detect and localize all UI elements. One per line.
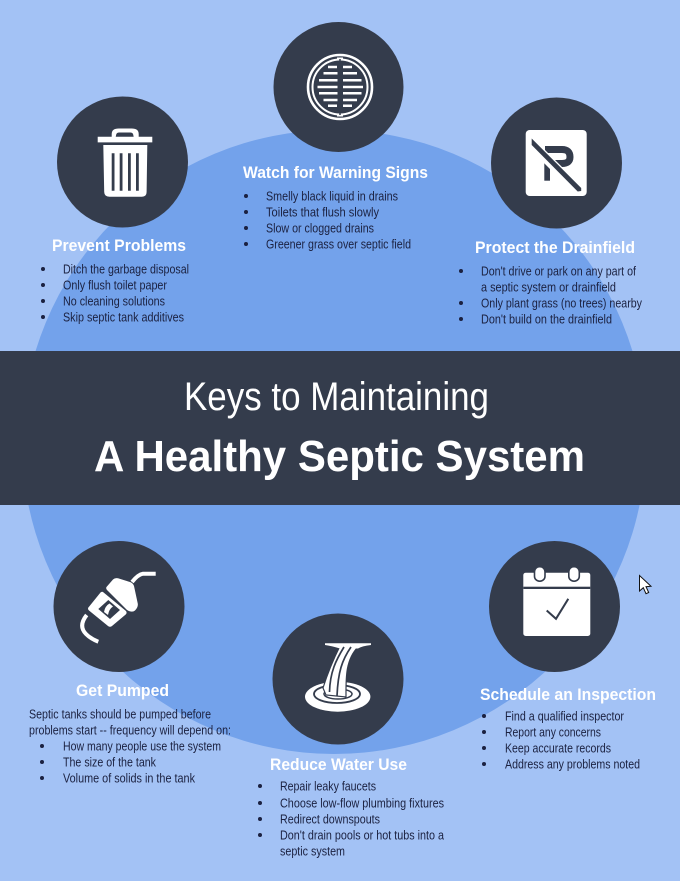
heading: Watch for Warning Signs [243, 163, 428, 182]
background circle [22, 130, 646, 754]
heading: Protect the Drainfield [475, 238, 635, 257]
panel: protect the drainfield [459, 98, 643, 326]
heading: Schedule an Inspection [480, 685, 656, 704]
heading: Prevent Problems [52, 236, 186, 255]
bullet list: Ditch the garbage disposal [63, 262, 189, 276]
title line 1: Keys to Maintaining [184, 375, 489, 419]
icon: calendar [489, 541, 620, 672]
bullet list: Toilets that flush slowly [266, 206, 380, 220]
bullet list [258, 780, 444, 858]
bullet list: Only plant grass (no trees) nearby [481, 296, 643, 310]
title line 2: A Healthy Septic System [94, 432, 585, 481]
icon: trash can [57, 96, 188, 228]
bullet list: Don't drive or park on any part of [481, 264, 636, 278]
bullet list: Only flush toilet paper [63, 278, 167, 292]
icon: pump nozzle [54, 541, 184, 672]
bullet list: Don't drain pools or hot tubs into a [280, 828, 444, 842]
panel: reduce water use [258, 614, 444, 858]
bullet list [40, 740, 221, 786]
bullet list: Redirect downspouts [280, 812, 380, 826]
bullet list: No cleaning solutions [63, 294, 165, 308]
bullet list: Skip septic tank additives [63, 310, 184, 324]
heading: Get Pumped [76, 681, 169, 700]
panel: get pumped [29, 541, 231, 786]
paragraph: Septic tanks should be pumped before [29, 708, 211, 722]
panel: watch for warning signs [243, 22, 428, 252]
bullet list [244, 190, 411, 252]
panel: schedule an inspection [480, 541, 656, 772]
bullet list: Address any problems noted [505, 758, 640, 772]
bullet list: Choose low-flow plumbing fixtures [280, 796, 444, 810]
bullet list: Repair leaky faucets [280, 780, 376, 794]
bullet list [41, 262, 189, 324]
bullet list: The size of the tank [63, 756, 157, 770]
bullet list: Keep accurate records [505, 742, 611, 756]
icon: drain cover [274, 22, 404, 152]
panel: prevent problems [41, 96, 189, 324]
bullet list: septic system [280, 844, 345, 858]
bullet list: Greener grass over septic field [266, 238, 411, 252]
heading: Reduce Water Use [270, 755, 407, 774]
bullet list: How many people use the system [63, 740, 221, 754]
icon: waterfall [272, 614, 404, 744]
bullet list: a septic system or drainfield [481, 280, 616, 294]
bullet list [459, 264, 643, 326]
bullet list: Volume of solids in the tank [63, 772, 196, 786]
bullet list: Smelly black liquid in drains [266, 190, 398, 204]
bullet list: Find a qualified inspector [505, 710, 624, 724]
paragraph: problems start -- frequency will depend on: [29, 724, 231, 738]
bullet list: Don't build on the drainfield [481, 312, 612, 326]
bullet list: Report any concerns [505, 726, 601, 740]
bullet list: Slow or clogged drains [266, 222, 374, 236]
icon: no parking [491, 98, 622, 228]
title banner [0, 351, 680, 505]
icon: mouse cursor [640, 576, 651, 594]
bullet list [482, 710, 640, 772]
paragraph [29, 708, 231, 738]
